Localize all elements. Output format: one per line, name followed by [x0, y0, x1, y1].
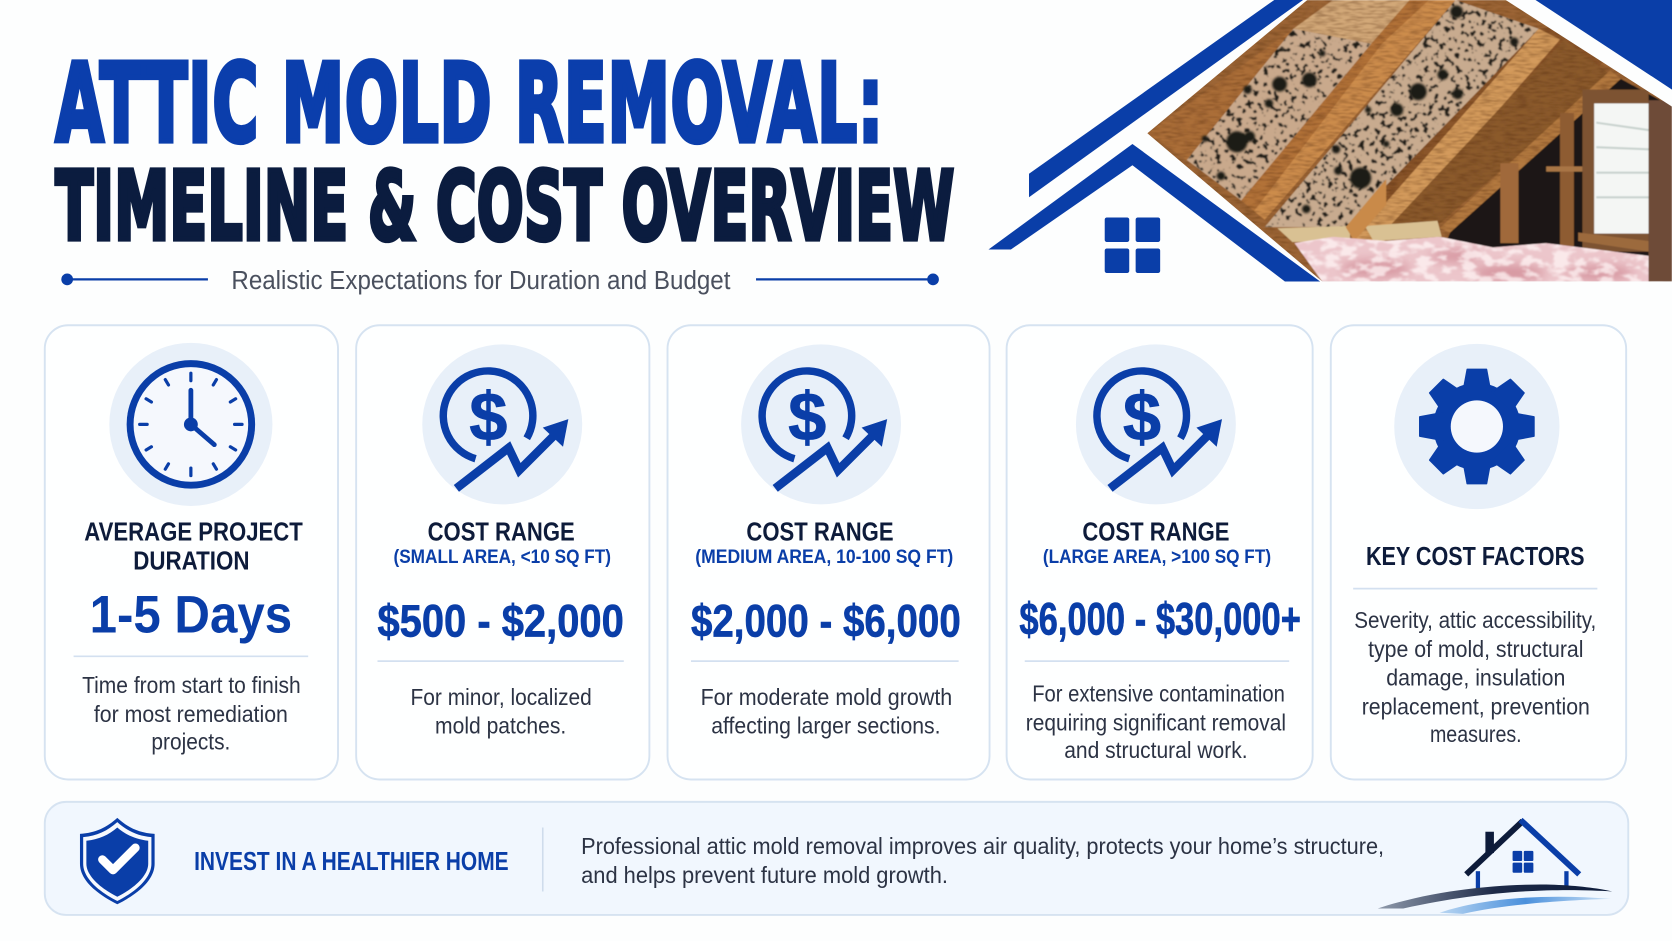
heading: COST RANGE	[428, 519, 575, 547]
roof graphic: blue house outline	[988, 0, 1672, 282]
card: cost range large area	[1007, 325, 1313, 779]
heading: AVERAGE PROJECT	[84, 519, 303, 547]
banner heading: INVEST IN A HEALTHIER HOME	[194, 848, 509, 876]
title: TIMELINE & COST OVERVIEW	[55, 152, 954, 262]
icon: dollar with rising arrow	[1076, 344, 1236, 504]
description	[701, 684, 952, 739]
icon: dollar with rising arrow: $	[1123, 379, 1161, 455]
description: for most remediation	[94, 701, 288, 727]
title: ATTIC MOLD REMOVAL:	[55, 40, 883, 166]
pink insulation	[1294, 236, 1650, 282]
description: damage, insulation	[1386, 665, 1565, 691]
value: price range: $500 - $2,000	[377, 595, 624, 647]
description: For moderate mold growth	[701, 684, 952, 710]
description: type of mold, structural	[1368, 636, 1583, 662]
mold panel right	[1258, 0, 1546, 229]
photo: moldy attic rafters with pink insulation	[1141, 0, 1672, 284]
heading: (MEDIUM AREA, 10-100 SQ FT)	[695, 547, 953, 568]
heading: COST RANGE	[1082, 519, 1229, 547]
banner: invest in a healthier home	[45, 802, 1628, 915]
description	[411, 684, 592, 739]
heading: (LARGE AREA, >100 SQ FT)	[1043, 547, 1271, 568]
subtitle with end-dot rules: Realistic Expectations for Duration and Budget	[231, 267, 730, 295]
description: replacement, prevention	[1362, 693, 1590, 719]
icon: shield with check	[80, 818, 155, 904]
card: average project duration	[45, 325, 338, 779]
description	[1026, 681, 1286, 763]
subtitle with end-dot rules	[61, 267, 939, 295]
mold panel left	[1186, 28, 1372, 201]
icon: gear	[1394, 344, 1560, 509]
banner text: and helps prevent future mold growth.	[581, 862, 948, 888]
description: For minor, localized	[411, 684, 592, 710]
heading	[1043, 519, 1271, 568]
card: key cost factors	[1331, 325, 1626, 779]
description: For extensive contamination	[1032, 681, 1285, 707]
icon: dollar with rising arrow: $	[469, 379, 507, 455]
description: mold patches.	[435, 713, 566, 739]
description: requiring significant removal	[1026, 709, 1286, 735]
description	[82, 672, 301, 755]
title	[55, 40, 954, 262]
value: price range: $6,000 - $30,000+	[1019, 592, 1301, 644]
heading: DURATION	[133, 547, 250, 575]
heading	[393, 519, 611, 568]
description: Severity, attic accessibility,	[1354, 607, 1596, 633]
description: and structural work.	[1064, 737, 1248, 763]
description	[1354, 607, 1596, 747]
description: Time from start to finish	[82, 672, 301, 698]
icon: house on swoosh	[1378, 820, 1612, 914]
icon: dollar with rising arrow	[741, 344, 901, 504]
heading: KEY COST FACTORS	[1366, 543, 1585, 571]
icon: clock	[109, 343, 272, 506]
icon: dollar with rising arrow	[422, 344, 582, 504]
attic window	[1578, 90, 1649, 252]
heading	[84, 519, 303, 575]
description: affecting larger sections.	[711, 713, 940, 739]
banner text: Professional attic mold removal improves air quality, protects your home’s structure,	[581, 833, 1384, 859]
card: cost range small area	[356, 325, 649, 779]
card: cost range medium area	[668, 325, 990, 779]
value: price range: $2,000 - $6,000	[691, 595, 961, 647]
description: measures.	[1430, 721, 1522, 747]
description: projects.	[151, 729, 230, 755]
heading: COST RANGE	[746, 519, 894, 547]
value: 1-5 days: 1-5 Days	[90, 585, 292, 644]
icon: dollar with rising arrow: $	[788, 379, 826, 455]
banner text	[581, 833, 1384, 888]
heading: (SMALL AREA, <10 SQ FT)	[393, 547, 611, 568]
heading	[695, 519, 953, 568]
